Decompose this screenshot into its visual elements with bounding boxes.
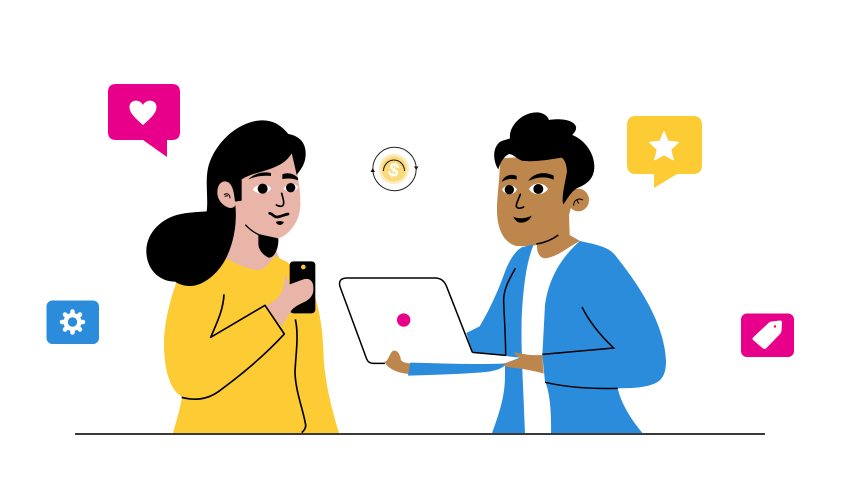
icon: pink heart speech bubble: [108, 84, 180, 157]
man lapel lines: [504, 268, 515, 356]
man blue jacket right: [542, 241, 666, 433]
laptop base line: [472, 352, 506, 355]
man smile: [513, 216, 532, 223]
man left hand: [384, 351, 412, 374]
woman mouth: [270, 213, 288, 225]
woman phone: [290, 261, 315, 313]
man eyebrows: [502, 173, 554, 182]
man jaw line: [536, 235, 558, 244]
woman ear: [217, 181, 236, 208]
figure: woman with phone: [146, 120, 339, 433]
laptop: [340, 278, 520, 363]
woman sleeve and cuff lines: [182, 294, 284, 399]
laptop logo dot: [397, 313, 410, 327]
man right hand: [504, 352, 544, 374]
woman eyebrows: [248, 172, 298, 180]
woman sweater seam: [295, 319, 306, 433]
icon: dollar coin with cycle arrows: [370, 147, 418, 191]
man nose: [516, 194, 524, 208]
figure: man with laptop: [340, 112, 666, 433]
icon: blue gear badge: [46, 300, 99, 344]
icon: dollar coin with cycle arrows: $: [386, 159, 402, 183]
man ear: [568, 189, 589, 211]
woman hair: [146, 120, 306, 286]
woman hand: [267, 276, 313, 327]
man hair: [494, 112, 594, 204]
man forearm: [408, 363, 507, 376]
man ear detail: [574, 199, 583, 206]
man blue jacket left: [466, 244, 534, 433]
woman nose: [276, 193, 284, 206]
woman ear detail: [224, 194, 230, 198]
man eyes: [502, 185, 517, 194]
woman yellow sweater: [164, 256, 339, 433]
woman jaw line: [245, 225, 267, 238]
icon: pink price tag badge: [741, 314, 794, 357]
man neck and face: [497, 155, 580, 258]
man sleeve lines: [542, 307, 618, 388]
icon: yellow star speech bubble: [627, 116, 702, 188]
woman chin shadow: [258, 234, 278, 258]
man white shirt: [522, 245, 578, 433]
woman eyes: [253, 184, 271, 194]
woman neck and face: [223, 153, 300, 273]
table line: [75, 433, 765, 435]
laptop outline: [340, 278, 472, 363]
